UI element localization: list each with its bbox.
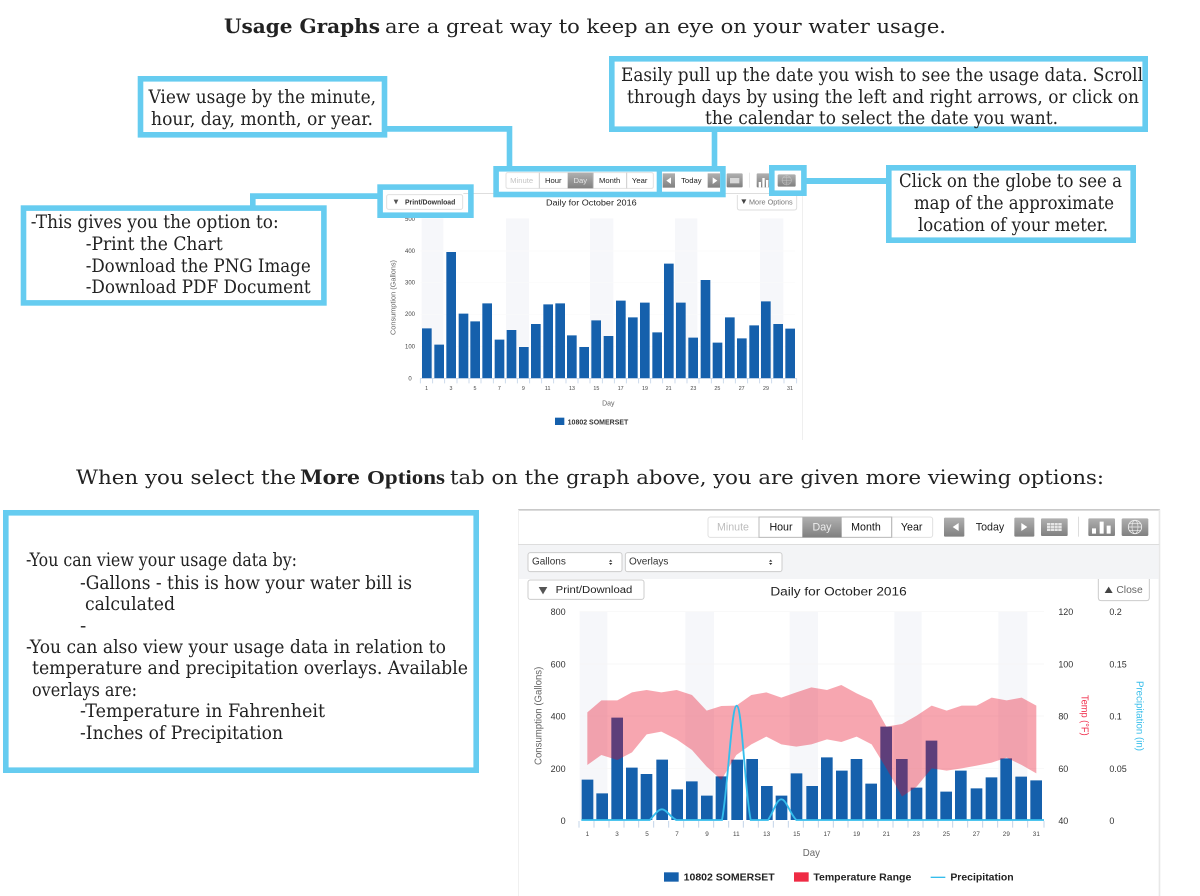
x axis: 11	[545, 386, 550, 392]
x axis: 15	[593, 386, 599, 392]
callout: globe	[772, 168, 1133, 240]
x axis: 27	[739, 386, 745, 392]
legend: Precipitation	[950, 873, 1014, 884]
y axis: 100	[405, 344, 416, 350]
x axis: 19	[853, 831, 861, 838]
callout: date selection: through days by using the left and right arrows, or click on	[627, 87, 1139, 108]
print download button	[387, 195, 463, 209]
heading: more options: When you select the	[76, 465, 296, 489]
x axis: 7	[675, 831, 679, 838]
x axis	[579, 821, 1044, 838]
callout: print and download	[24, 187, 471, 303]
panel: viewing options text: temperature and precipitation overlays. Available	[32, 658, 468, 679]
y axis: 0	[408, 376, 412, 382]
panel: viewing options text: -Temperature in Fahrenheit	[80, 701, 326, 722]
left y axis: 600	[551, 660, 566, 670]
combo chart: consumption, temperature, precipitation	[533, 607, 1145, 859]
x axis: 3	[450, 386, 453, 392]
y axis: 400	[405, 249, 416, 255]
left y axis: 200	[551, 764, 566, 774]
callout: print and download: -This gives you the option to:	[31, 212, 279, 233]
toolbar: time range buttons	[708, 517, 933, 537]
toolbar: time range buttons: Month	[851, 521, 881, 533]
precipitation axis title: Precipitation (in)	[1134, 681, 1145, 751]
y axis	[405, 217, 416, 382]
x axis: 9	[705, 831, 709, 838]
x axis: 17	[823, 831, 831, 838]
x axis: 7	[498, 386, 501, 392]
title: Usage Graphs	[224, 14, 380, 38]
x axis: 21	[666, 386, 672, 392]
x axis: 1	[586, 831, 590, 838]
toolbar: time range buttons: Day	[813, 521, 832, 533]
callout: date selection: Easily pull up the date you wish to see the usage data. Scroll	[621, 65, 1143, 86]
x axis: 25	[714, 386, 720, 392]
heading: more options: tab on the graph above, you are given more viewing options:	[450, 465, 1104, 489]
icon: calendar	[1041, 518, 1068, 536]
toolbar: time range buttons: Minute	[510, 176, 533, 185]
y axis: 500	[405, 217, 416, 223]
callout: print and download: -Print the Chart	[86, 234, 223, 255]
x axis: 27	[973, 831, 980, 838]
x axis: 19	[642, 386, 648, 392]
dropdown: overlays: Overlays	[629, 556, 668, 567]
chart screenshot: daily usage	[387, 173, 803, 440]
callout: globe: map of the approximate	[914, 193, 1114, 214]
icon: globe	[1122, 518, 1148, 536]
callout: date selection: the calendar to select the date you want.	[705, 108, 1058, 129]
x axis: 21	[883, 831, 890, 838]
precipitation y axis: 0.2	[1109, 607, 1122, 617]
panel: viewing options text	[6, 513, 476, 770]
left y axis: 800	[551, 607, 566, 617]
x axis: 5	[474, 386, 477, 392]
precipitation y axis: 0.1	[1109, 712, 1122, 722]
x axis: 5	[645, 831, 649, 838]
left y axis title: Consumption (Gallons)	[533, 667, 544, 765]
x axis: 23	[913, 831, 920, 838]
callout: globe: Click on the globe to see a	[899, 171, 1122, 192]
x axis: 29	[763, 386, 769, 392]
toolbar: date navigation: Today	[681, 176, 702, 185]
toolbar: time range buttons: Day	[574, 176, 587, 185]
toolbar: time range buttons	[506, 173, 653, 188]
temperature y axis: 40	[1058, 816, 1068, 826]
y axis: 200	[405, 312, 416, 318]
callout: date selection	[612, 59, 1145, 168]
legend: 10802 SOMERSET	[684, 873, 775, 884]
heading: more options: Options	[367, 467, 445, 489]
x axis: 9	[522, 386, 525, 392]
panel: viewing options text: -You can also view your usage data in relation to	[26, 637, 446, 658]
toolbar: time range buttons: Minute	[717, 521, 749, 533]
precipitation y axis: 0.05	[1109, 764, 1127, 774]
dropdown: gallons: Gallons	[532, 556, 566, 567]
dropdown: gallons	[528, 553, 622, 572]
icon: globe	[778, 174, 796, 187]
toolbar: time range buttons: Hour	[769, 521, 793, 533]
left y axis: 400	[551, 712, 566, 722]
icon: bar chart	[1078, 517, 1115, 537]
bars	[582, 718, 1042, 820]
bar chart: consumption by day	[390, 217, 797, 407]
x axis	[420, 378, 797, 392]
precipitation y axis	[1109, 607, 1127, 826]
temperature range band	[587, 685, 1036, 797]
precipitation line	[581, 706, 1044, 820]
dropdown: overlays	[625, 553, 782, 572]
x axis: 31	[1033, 831, 1040, 838]
panel: viewing options text: -Inches of Precipitation	[80, 723, 283, 744]
x axis: 23	[690, 386, 696, 392]
toolbar: time range buttons: Year	[901, 521, 923, 533]
heading: more options	[76, 465, 1104, 489]
x axis: 17	[618, 386, 624, 392]
print download button: Print/Download	[405, 197, 455, 206]
callout: time range	[140, 79, 512, 166]
more options button	[737, 195, 797, 210]
panel: viewing options text: overlays are:	[32, 680, 137, 701]
x axis: 15	[793, 831, 801, 838]
legend	[555, 418, 629, 426]
temperature y axis: 120	[1058, 607, 1073, 617]
x axis: 3	[615, 831, 619, 838]
toolbar: time range buttons: Year	[632, 176, 648, 185]
chart title: Daily for October 2016	[546, 198, 637, 208]
callout: time range: hour, day, month, or year.	[151, 109, 373, 130]
x axis: 25	[943, 831, 950, 838]
left y axis: 0	[561, 816, 566, 826]
callout: globe: location of your meter.	[918, 215, 1108, 236]
callout: print and download: -Download the PNG Image	[86, 256, 311, 277]
toolbar: date navigation	[663, 173, 720, 188]
print download button: Print/Download	[556, 585, 632, 596]
icon: calendar	[727, 173, 743, 187]
x axis: 31	[787, 386, 793, 392]
x axis title: Day	[602, 400, 615, 407]
temperature y axis: 100	[1058, 660, 1073, 670]
title: are a great way to keep an eye on your water usage.	[385, 14, 946, 38]
temperature axis title: Temp (°F)	[1079, 695, 1090, 736]
legend: Temperature Range	[813, 873, 912, 884]
temperature y axis	[1058, 607, 1073, 826]
chart title: Daily for October 2016	[770, 585, 907, 598]
heading: more options: More	[300, 465, 360, 489]
x axis: 13	[569, 386, 575, 392]
precipitation y axis: 0.15	[1109, 660, 1127, 670]
callout: time range: View usage by the minute,	[148, 87, 376, 108]
chart screenshot: with overlays	[518, 509, 1160, 896]
temperature y axis: 80	[1058, 712, 1068, 722]
print download button	[528, 580, 644, 599]
left y axis	[551, 607, 566, 826]
callout: print and download: -Download PDF Document	[86, 277, 311, 298]
icon: bar chart	[749, 173, 770, 188]
legend	[664, 872, 1014, 884]
y axis: 300	[405, 280, 416, 286]
panel: viewing options text: -You can view your usage data by:	[26, 550, 297, 571]
toolbar: date navigation	[944, 518, 1034, 537]
x axis: 11	[733, 831, 740, 838]
precipitation y axis: 0	[1109, 816, 1114, 826]
toolbar: time range buttons: Month	[599, 176, 620, 185]
toolbar: time range buttons: Hour	[545, 176, 562, 185]
toolbar: date navigation: Today	[976, 521, 1005, 533]
bars	[422, 252, 795, 378]
panel: viewing options text: calculated	[85, 594, 175, 615]
x axis: 1	[425, 386, 428, 392]
highlight: range and date toolbar	[496, 169, 723, 194]
more options button: More Options	[749, 197, 793, 206]
close button: Close	[1116, 585, 1143, 596]
x axis title: Day	[803, 848, 820, 859]
x axis: 13	[763, 831, 771, 838]
temperature y axis: 60	[1058, 764, 1068, 774]
close button	[1098, 579, 1149, 601]
legend: 10802 SOMERSET	[568, 419, 629, 426]
y axis title: Consumption (Gallons)	[390, 260, 397, 335]
x axis: 29	[1003, 831, 1010, 838]
panel: viewing options text: -	[80, 616, 86, 637]
panel: viewing options text: -Gallons - this is how your water bill is	[80, 573, 412, 594]
